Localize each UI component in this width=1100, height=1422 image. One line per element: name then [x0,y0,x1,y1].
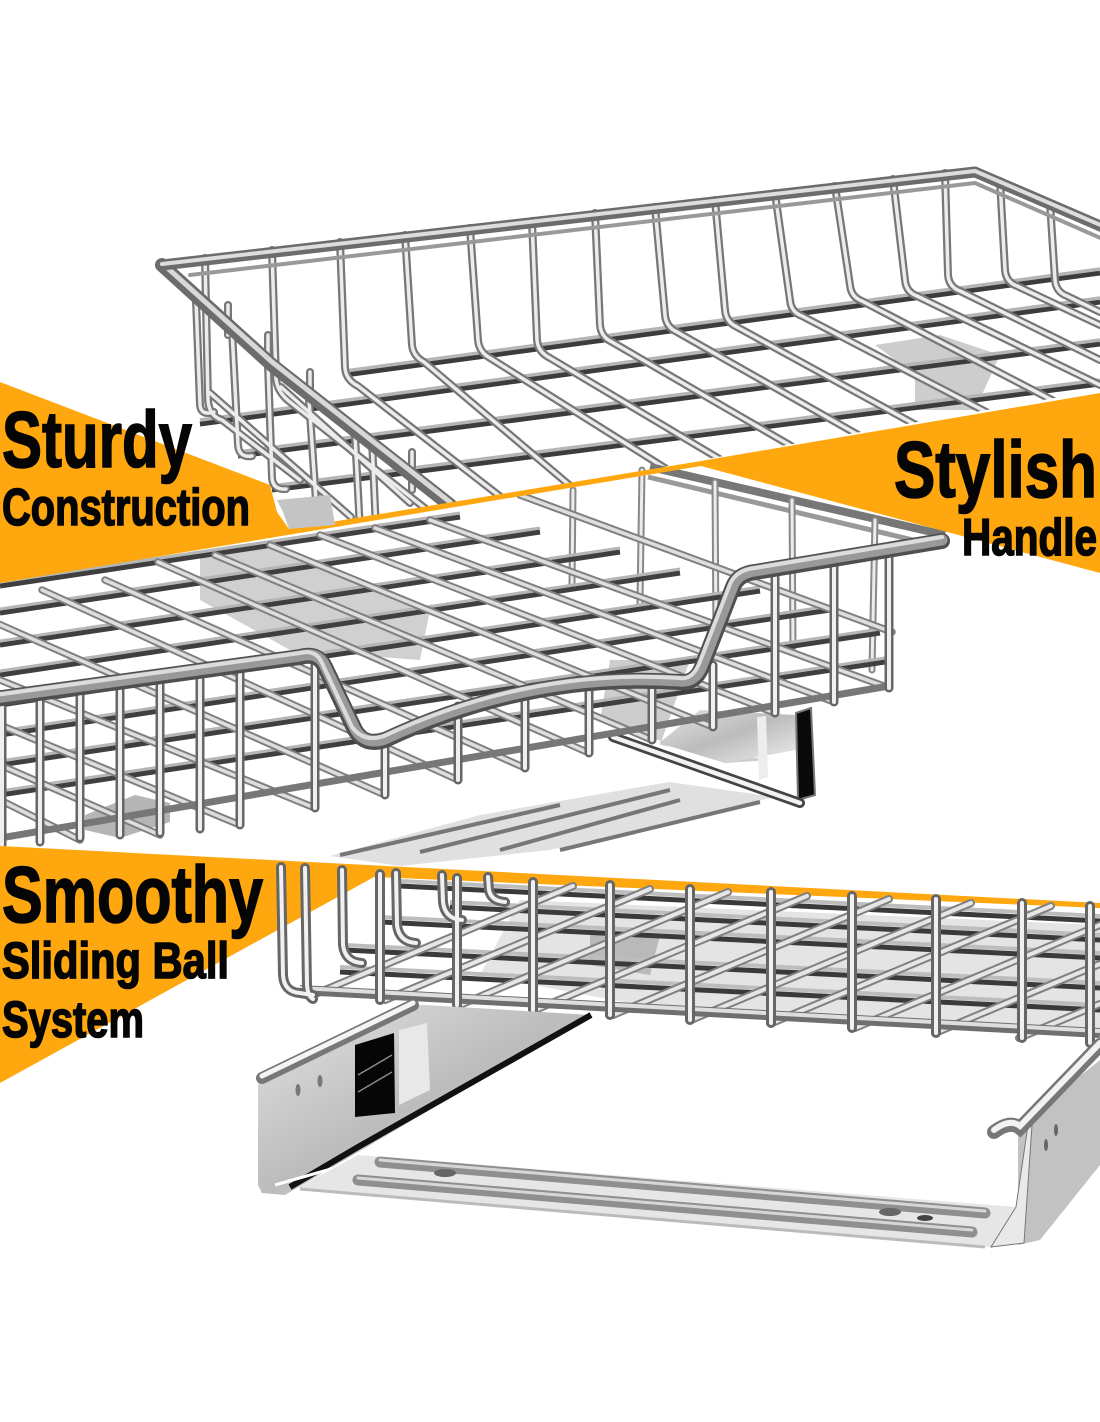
bottom plate [297,1155,1016,1247]
orange banner: lower [0,846,1100,1083]
top basket [162,171,1100,543]
orange banner: upper [0,382,1100,583]
label: Sturdy Construction [2,395,250,537]
lower floor tint [480,900,1100,1030]
lower uprights [281,867,1090,1043]
middle floor brackets [200,548,430,660]
lower front rail [300,990,1100,1033]
left slide rail [258,1003,591,1195]
white area below the upper band [0,390,1100,1422]
lower grey brackets [590,930,660,975]
stylish handle [0,537,942,742]
lower basket [281,867,1100,1043]
label: Smoothy Sliding Ball System: Sliding Ball [2,932,229,989]
lower floor wires [313,881,1100,1038]
middle basket [0,467,945,866]
bottom slide frame [258,1003,1100,1247]
label: Stylish Handle [894,425,1097,567]
top basket rim [162,171,1100,505]
label: Sturdy Construction: Sturdy [2,395,192,484]
middle floor wires [0,495,892,840]
label: Sturdy Construction: Construction [2,479,250,537]
white area below the lower band [0,846,1100,1422]
label: Smoothy Sliding Ball System: System [2,991,144,1048]
middle front uprights [2,548,889,845]
grey bracket over banner [277,495,335,529]
label: Smoothy Sliding Ball System: Smoothy [2,850,263,939]
middle front rails [0,686,889,838]
middle back wall [572,467,945,670]
mounting bracket [875,335,1000,410]
right slide rail [991,1043,1100,1247]
slide rail end [330,708,815,866]
label: Smoothy Sliding Ball System [2,850,263,1048]
